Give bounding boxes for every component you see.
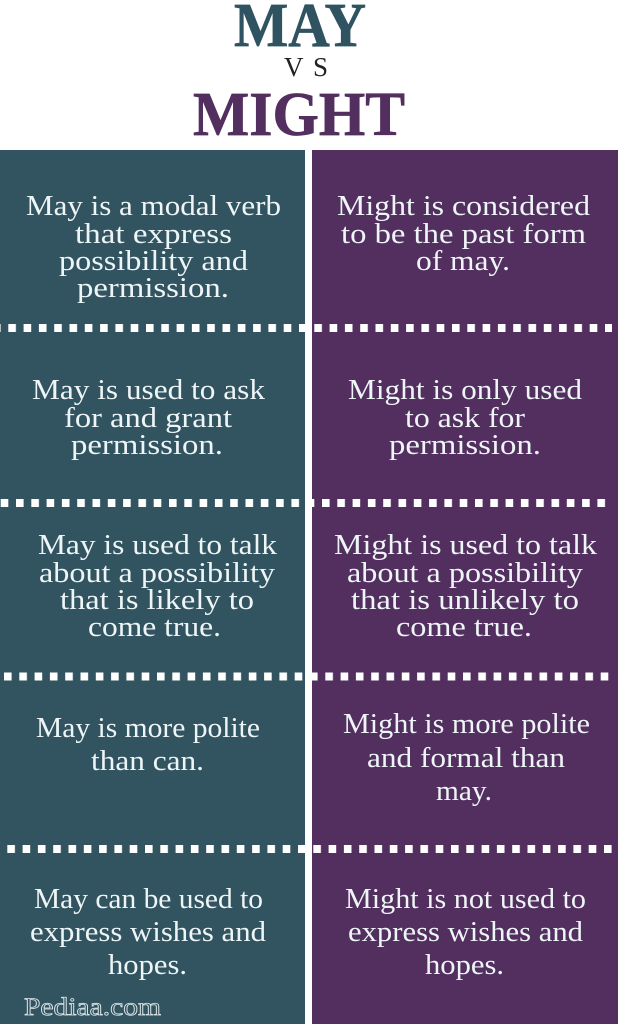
- text: may row 3: about a possibility: [39, 558, 275, 589]
- text: might row 3: about a possibility: [347, 558, 583, 589]
- text: might row 2: [348, 375, 582, 461]
- text: may row 5: express wishes and: [30, 917, 266, 948]
- panel: may column: [0, 150, 305, 1024]
- text: might row 1: [337, 191, 590, 277]
- text: might row 3: Might is used to talk: [334, 530, 597, 561]
- text: may row 5: hopes.: [108, 950, 187, 981]
- text: may row 2: [32, 375, 265, 461]
- text: might row 4: [343, 709, 590, 807]
- text: might row 5: hopes.: [425, 950, 504, 981]
- text: might row 4: may.: [436, 776, 492, 807]
- row 2 separator: [0, 499, 612, 507]
- text: might row 3: that is unlikely to: [351, 585, 579, 616]
- text: may row 1: May is a modal verb: [26, 191, 281, 222]
- text: may row 3: [38, 530, 277, 643]
- text: may row 3: May is used to talk: [38, 530, 277, 561]
- text: may row 4: than can.: [91, 746, 204, 777]
- title: [193, 0, 405, 149]
- text: might row 5: [345, 884, 586, 981]
- text: might row 1: to be the past form: [341, 219, 586, 250]
- text: may row 3: that is likely to: [60, 585, 254, 616]
- text: might row 3: [334, 530, 597, 643]
- row 3 separator: [0, 672, 612, 680]
- text: may row 2: permission.: [71, 430, 223, 461]
- text: might row 5: express wishes and: [348, 917, 583, 948]
- text: might row 2: Might is only used: [348, 375, 582, 406]
- text: may row 1: [26, 191, 281, 304]
- text: might row 2: permission.: [389, 430, 541, 461]
- text: might row 5: Might is not used to: [345, 884, 586, 915]
- text: may row 1: possibility and: [59, 246, 248, 277]
- text: may row 4: [36, 713, 260, 777]
- logo: Pediaa.com: Pediaa.com: [24, 994, 162, 1021]
- text: may row 5: [30, 884, 266, 981]
- text: might row 4: and formal than: [367, 743, 565, 774]
- text: might row 1: of may.: [416, 246, 510, 277]
- row 4 separator: [0, 845, 612, 853]
- text: may row 5: May can be used to: [34, 884, 263, 915]
- heading: Might: MIGHT: [193, 81, 405, 149]
- text: may row 2: for and grant: [64, 403, 232, 434]
- row 1 separator: [0, 324, 612, 332]
- text: may row 3: come true.: [88, 612, 221, 643]
- text: may row 1: that express: [75, 219, 232, 250]
- panel: might column: [312, 150, 618, 1024]
- text: may row 2: May is used to ask: [32, 375, 265, 406]
- text: may row 1: permission.: [77, 273, 229, 304]
- text: might row 2: to ask for: [405, 403, 526, 434]
- text: might row 1: Might is considered: [337, 191, 590, 222]
- heading: vs: VS: [284, 52, 328, 82]
- text: might row 3: come true.: [396, 612, 532, 643]
- text: might row 4: Might is more polite: [343, 709, 590, 740]
- text: may row 4: May is more polite: [36, 713, 260, 744]
